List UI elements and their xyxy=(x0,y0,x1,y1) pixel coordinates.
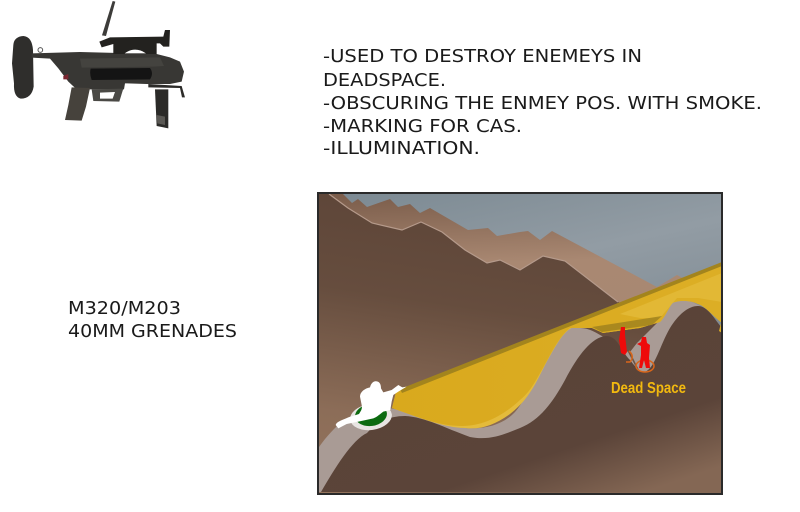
yellow trajectory light layer xyxy=(392,263,722,428)
enemy position markers xyxy=(626,351,654,372)
launcher body xyxy=(32,52,184,89)
icon: white soldier silhouette xyxy=(336,381,407,428)
text block: uses: -USED TO DESTROY ENEMEYS IN xyxy=(323,47,642,67)
launcher sight rail xyxy=(99,30,170,54)
front hill xyxy=(321,306,722,493)
yellow shadow xyxy=(592,316,662,332)
grey second hump xyxy=(630,300,722,375)
far mountains xyxy=(330,194,690,330)
text block: uses: -OBSCURING THE ENMEY POS. WITH SMOKE. xyxy=(323,94,762,114)
near mountain ridge highlight xyxy=(329,194,618,302)
text block: uses: DEADSPACE. xyxy=(323,71,446,91)
panel: dead space diagram xyxy=(318,193,722,494)
launcher grip xyxy=(65,87,90,121)
launcher antenna sight xyxy=(102,1,115,36)
launcher barrel xyxy=(90,68,152,80)
weapon label: M320/M203 xyxy=(68,299,181,319)
yellow edge blob xyxy=(719,323,722,333)
launcher fore grip xyxy=(155,89,168,128)
grey terrain band xyxy=(319,328,640,492)
text block: uses xyxy=(323,47,762,159)
label: dead space: Dead Space xyxy=(611,380,686,397)
icon: red enemy soldier left xyxy=(619,327,627,355)
weapon label xyxy=(68,299,237,342)
near mountain slope xyxy=(319,194,722,493)
icon: M320 grenade launcher photo xyxy=(12,1,185,128)
launcher sling loop xyxy=(38,48,43,52)
panel border xyxy=(318,193,722,494)
text block: uses: -ILLUMINATION. xyxy=(323,139,480,159)
upper light yellow xyxy=(620,273,722,318)
sky xyxy=(319,194,722,493)
yellow trajectory fill xyxy=(392,263,722,426)
launcher trigger guard xyxy=(92,89,123,102)
friendly position marker xyxy=(348,401,394,433)
icon: red enemy soldier right xyxy=(637,337,650,368)
launcher stock xyxy=(12,36,34,99)
trajectory dark edge xyxy=(400,262,722,393)
text block: uses: -MARKING FOR CAS. xyxy=(323,117,522,137)
weapon label: 40MM GRENADES xyxy=(68,322,237,342)
